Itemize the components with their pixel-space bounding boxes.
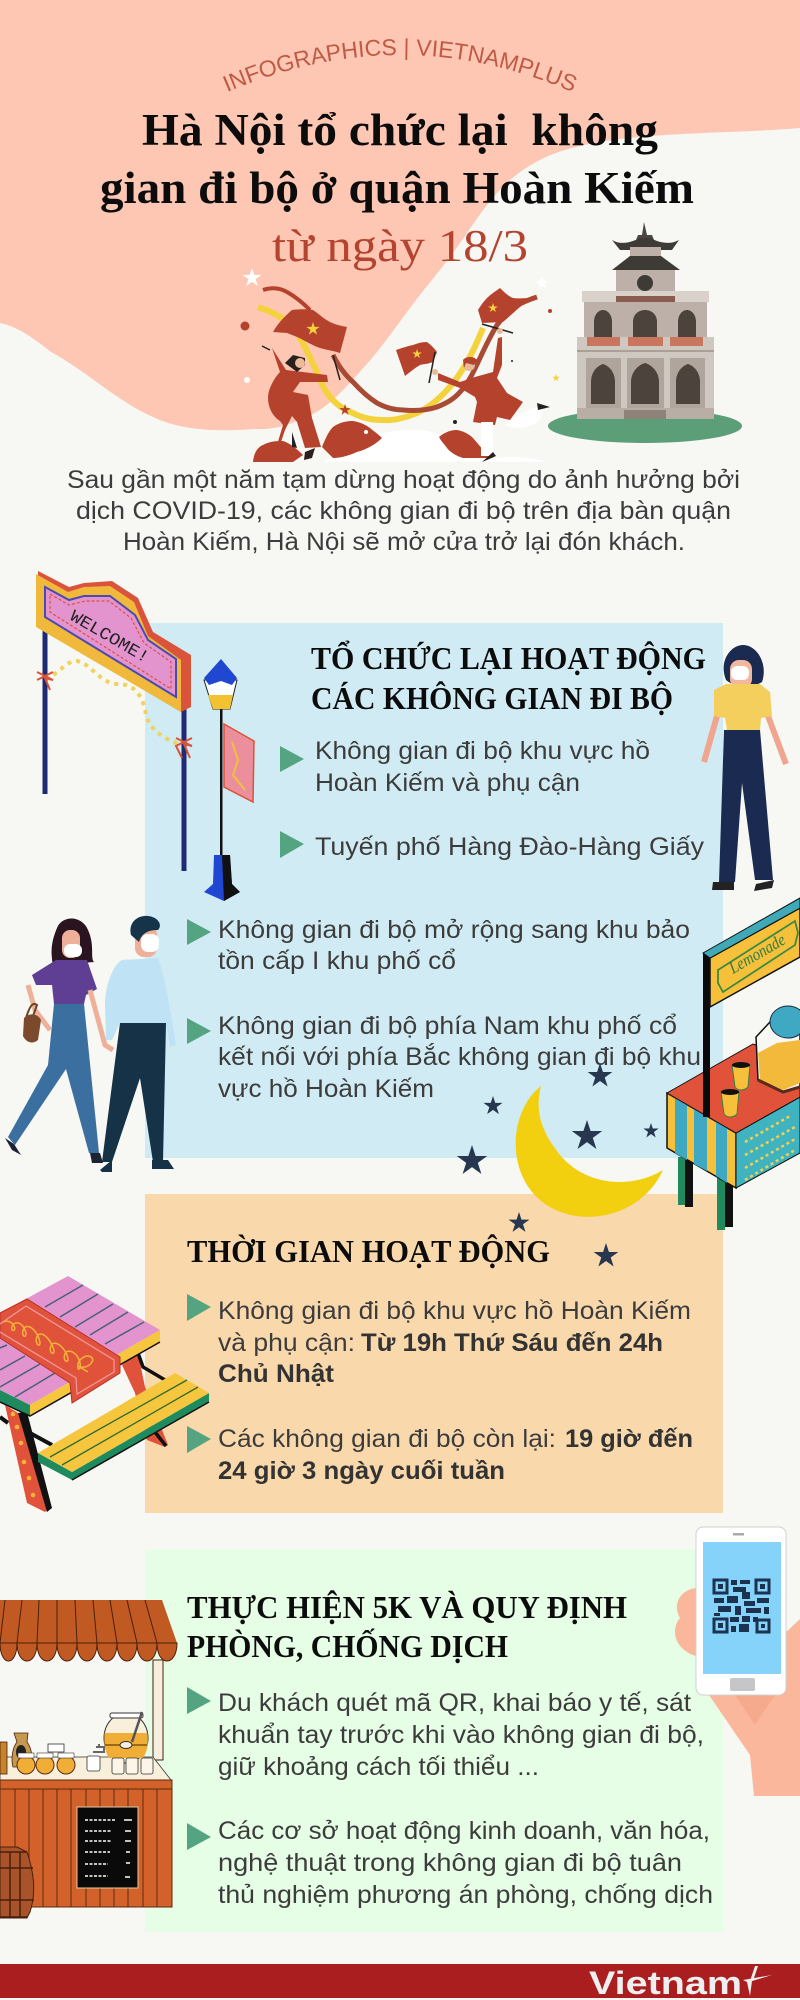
footer logo bbox=[589, 1965, 772, 2000]
panel heading: PHÒNG, CHỐNG DỊCH bbox=[187, 1628, 508, 1664]
illustration: lemonade stand bbox=[667, 898, 800, 1230]
bullet list: Không gian đi bộ phía Nam khu phố cổ bbox=[218, 1012, 677, 1040]
icon: chalkboard menu bbox=[77, 1807, 138, 1888]
illustration: moon and stars bbox=[457, 1063, 663, 1267]
illustration: flag dancers bbox=[240, 268, 560, 462]
bullet list: Không gian đi bộ khu vực hồ bbox=[315, 737, 650, 765]
bullet list: Du khách quét mã QR, khai báo y tế, sát bbox=[218, 1689, 691, 1717]
intro paragraph bbox=[67, 466, 740, 556]
illustration: picnic table bbox=[0, 1276, 209, 1512]
bullet list bbox=[187, 1294, 693, 1485]
intro paragraph: Hoàn Kiếm, Hà Nội sẽ mở cửa trở lại đón khách. bbox=[123, 528, 685, 556]
icon: QR code bbox=[714, 1580, 769, 1632]
illustration: market stall bbox=[0, 1600, 177, 1918]
panel heading: TỔ CHỨC LẠI HOẠT ĐỘNG bbox=[311, 640, 706, 676]
illustration: lemonade stand: Lemonade bbox=[725, 930, 789, 978]
illustration: couple walking bbox=[5, 916, 176, 1172]
bullet list: kết nối với phía Bắc không gian đi bộ khu bbox=[218, 1042, 701, 1071]
intro paragraph: Sau gần một năm tạm dừng hoạt động do ảnh hưởng bởi bbox=[67, 466, 740, 494]
bullet list: 24 giờ 3 ngày cuối tuần bbox=[218, 1457, 505, 1485]
bullet list: giữ khoảng cách tối thiểu ... bbox=[218, 1753, 539, 1781]
bullet list: Tuyến phố Hàng Đào-Hàng Giấy bbox=[315, 833, 705, 861]
illustration: woman in yellow top bbox=[704, 645, 786, 891]
bullet list: Không gian đi bộ mở rộng sang khu bảo bbox=[218, 916, 690, 944]
icon: barrel bbox=[0, 1847, 34, 1918]
header arc text: INFOGRAPHICS | VIETNAMPLUS bbox=[223, 38, 576, 92]
bullet list: 19 giờ đến bbox=[565, 1425, 693, 1453]
panel: operating hours bbox=[145, 1194, 723, 1513]
illustration: street lamp bbox=[204, 659, 254, 901]
intro paragraph: dịch COVID-19, các không gian đi bộ trên địa bàn quận bbox=[76, 497, 731, 525]
illustration: welcome sign bbox=[36, 571, 192, 871]
bullet list: Không gian đi bộ khu vực hồ Hoàn Kiếm bbox=[218, 1297, 691, 1325]
subtitle date: từ ngày 18/3 bbox=[272, 221, 528, 271]
panel heading bbox=[187, 1589, 627, 1664]
bullet list: nghệ thuật trong không gian đi bộ tuân bbox=[218, 1849, 682, 1877]
panel heading bbox=[311, 640, 706, 716]
panel heading: THỰC HIỆN 5K VÀ QUY ĐỊNH bbox=[187, 1589, 627, 1625]
bullet list: Các cơ sở hoạt động kinh doanh, văn hóa, bbox=[218, 1817, 710, 1845]
bullet list: Các không gian đi bộ còn lại: bbox=[218, 1425, 556, 1453]
title bbox=[100, 105, 694, 213]
footer bar bbox=[0, 1964, 800, 2000]
bullet list bbox=[187, 1687, 713, 1909]
bullet list bbox=[187, 737, 705, 1103]
bullet list: tồn cấp I khu phố cổ bbox=[218, 947, 456, 975]
bullet list: Hoàn Kiếm và phụ cận bbox=[315, 769, 580, 797]
bullet list: và phụ cận: bbox=[218, 1329, 355, 1357]
panel: 5K and epidemic rules bbox=[145, 1549, 723, 1932]
illustration: welcome sign: WELCOME! bbox=[66, 608, 152, 668]
illustration: hand holding phone with QR code bbox=[675, 1527, 800, 1796]
panel heading: CÁC KHÔNG GIAN ĐI BỘ bbox=[311, 680, 673, 716]
footer logo: Vietnam bbox=[589, 1965, 742, 2000]
illustration: Turtle Tower bbox=[548, 222, 742, 443]
bullet list: khuẩn tay trước khi vào không gian đi bộ, bbox=[218, 1721, 704, 1749]
bullet list: Từ 19h Thứ Sáu đến 24h bbox=[361, 1329, 663, 1357]
panel: reorganised walking spaces bbox=[145, 623, 723, 1158]
bullet list: Chủ Nhật bbox=[218, 1360, 335, 1388]
bullet list: vực hồ Hoàn Kiếm bbox=[218, 1075, 434, 1103]
panel heading: THỜI GIAN HOẠT ĐỘNG bbox=[187, 1233, 550, 1269]
title: Hà Nội tổ chức lại không bbox=[142, 105, 659, 155]
bullet list: thủ nghiệm phương án phòng, chống dịch bbox=[218, 1881, 713, 1909]
title: gian đi bộ ở quận Hoàn Kiếm bbox=[100, 163, 694, 213]
background peach blob bbox=[0, 0, 800, 430]
